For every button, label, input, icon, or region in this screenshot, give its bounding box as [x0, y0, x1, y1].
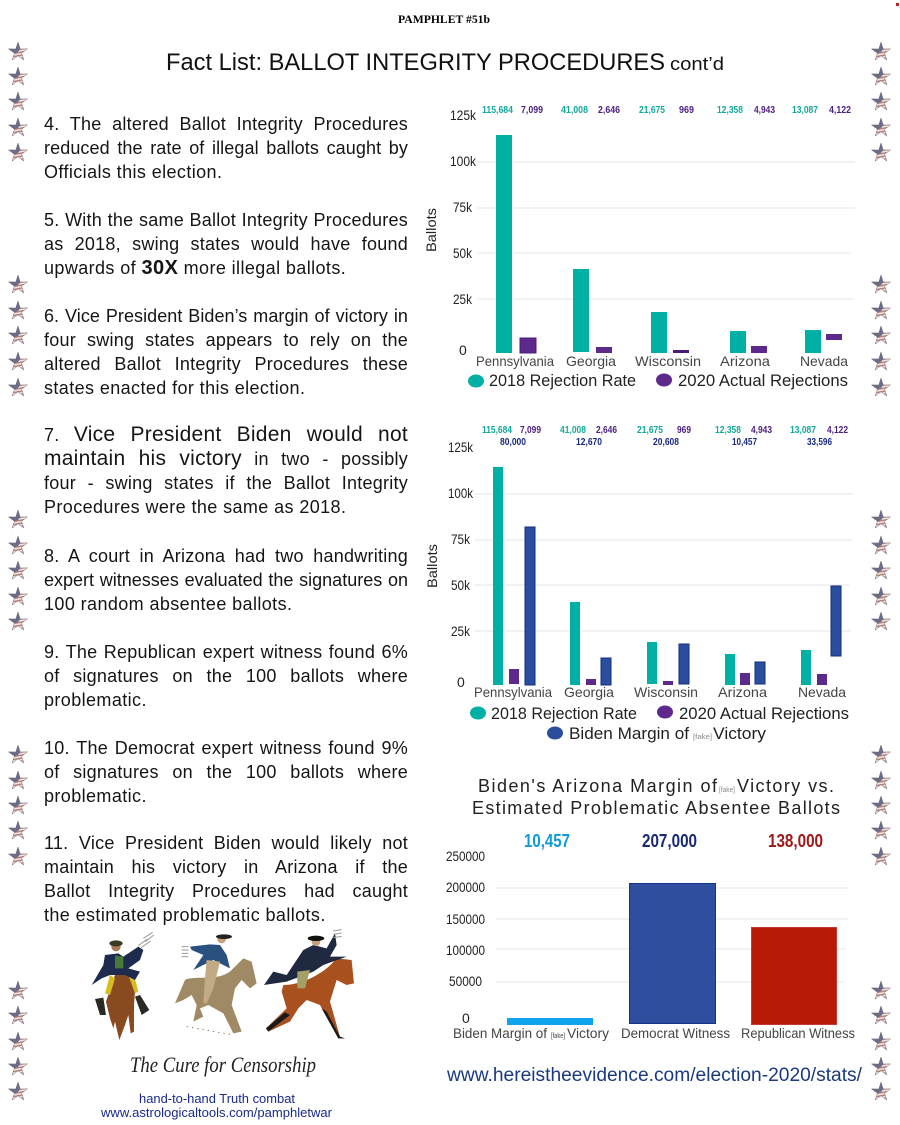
fact 7: Procedures were the same as 2018. [44, 497, 346, 517]
chart 2 y axis: 0 [457, 674, 465, 690]
chart 3 value labels: 138,000 [768, 831, 823, 851]
chart 2 legend: Biden Margin of [569, 724, 689, 743]
chart 1 bars [496, 135, 842, 353]
fact 6: altered Ballot Integrity Procedures these [44, 354, 408, 374]
chart 2 state labels: Georgia [564, 684, 614, 700]
chart 3 title [472, 776, 840, 818]
fact 8: 100 random absentee ballots. [44, 594, 292, 614]
chart 2 state labels [474, 684, 846, 700]
chart 2 value labels: 4,943 [751, 425, 772, 436]
chart 2 y axis: 75k [451, 531, 471, 547]
chart 2 y axis: 125k [448, 439, 474, 455]
chart 1 state labels: Nevada [800, 353, 848, 369]
chart 2 legend [470, 704, 849, 743]
chart 2 bars [493, 467, 841, 685]
chart 3 value labels: 207,000 [642, 831, 697, 851]
chart 2 legend: Victory [713, 724, 767, 743]
chart 1 state labels: Georgia [566, 353, 616, 369]
chart 2 y axis: Ballots [424, 544, 440, 588]
stars: left column [8, 42, 28, 1100]
chart 2 legend: 2020 Actual Rejections [679, 704, 849, 723]
chart 2 state labels: Arizona [718, 684, 767, 700]
chart 3 y axis: 100000 [446, 942, 485, 958]
pamphlet war url: www.astrologicaltools.com/pamphletwar [100, 1105, 333, 1120]
fact 4: Officials this election. [44, 162, 222, 182]
chart 2 value labels: 21,675 [637, 425, 663, 436]
fact 7: 7. Vice President Biden would not [44, 423, 408, 446]
fact 9: of signatures on the 100 ballots where [44, 666, 408, 686]
chart 3: Arizona margin vs problematic ballots [446, 776, 855, 1041]
chart 3 category labels: Biden Margin of [453, 1025, 547, 1041]
chart 1 state labels: Wisconsin [635, 353, 701, 369]
fact 11: maintain his victory in Arizona if the [44, 857, 408, 877]
fact 6: four swing states appears to rely on the [44, 330, 408, 350]
chart 3 y axis: 250000 [446, 848, 485, 864]
fact 11: 11. Vice President Biden would likely not [44, 833, 408, 853]
chart 2 value labels: 10,457 [732, 437, 757, 448]
source url: www.hereistheevidence.com/election-2020/stats/ [446, 1065, 863, 1086]
chart 1 y axis: 0 [459, 342, 467, 358]
chart 1 y axis: 25k [453, 291, 473, 307]
chart 3 title: Victory vs. [737, 776, 834, 796]
chart 3 title: Estimated Problematic Absentee Ballots [472, 798, 840, 818]
chart 2 legend: 2018 Rejection Rate [491, 704, 637, 723]
chart 3 value labels: 10,457 [524, 831, 570, 851]
fact 11 [44, 833, 408, 925]
chart 2 y axis: 50k [451, 577, 471, 593]
fact 8 [44, 546, 408, 614]
fact 8: 8. A court in Arizona had two handwriting [44, 546, 408, 566]
chart 2 y axis: 25k [451, 623, 471, 639]
chart 2 value labels: 115,684 [482, 425, 512, 436]
fact 7: maintain his victory in two - possibly [44, 447, 408, 470]
fact 11: Ballot Integrity Procedures had caught [44, 881, 408, 901]
chart 2 y axis: 100k [448, 485, 474, 501]
chart 2 value labels: 12,358 [715, 425, 741, 436]
chart 2 legend: [fake] [693, 734, 712, 741]
chart 2 value labels: 41,008 [560, 425, 586, 436]
chart 3 bars [507, 884, 836, 1025]
fact 11: the estimated problematic ballots. [44, 905, 326, 925]
chart 1 y axis: Ballots [423, 208, 439, 252]
fact 7 [44, 423, 408, 517]
fact 4: reduced the rate of illegal ballots caught by [44, 138, 408, 158]
tagline: hand-to-hand Truth combat [139, 1091, 295, 1106]
fact 9: 9. The Republican expert witness found 6% [44, 642, 408, 662]
chart 3 y axis: 50000 [449, 973, 482, 989]
chart 1 value labels: 969 [679, 105, 694, 116]
title: cont’d [670, 54, 724, 74]
fact 4 [44, 114, 408, 182]
chart 1 y axis: 125k [450, 107, 477, 123]
chart 1 legend: 2020 Actual Rejections [678, 371, 848, 390]
chart 2 y axis [424, 439, 474, 690]
chart 1 value labels: 7,099 [521, 105, 543, 116]
chart 2 state labels: Pennsylvania [474, 684, 552, 700]
illustration: three riders on horseback [92, 930, 354, 1040]
chart 1 value labels: 21,675 [639, 105, 665, 116]
fact 7: four - swing states if the Ballot Integrity [44, 473, 408, 493]
chart 2 value labels: 33,596 [807, 437, 832, 448]
illustration caption: the cure for censorship: The Cure for Censorship [130, 1052, 316, 1077]
chart 2 value labels: 7,099 [520, 425, 541, 436]
fact 9: problematic. [44, 690, 147, 710]
chart 1 value labels: 2,646 [598, 105, 620, 116]
fact 5: upwards of 30X more illegal ballots. [44, 257, 346, 279]
rider 2 [175, 934, 257, 1035]
chart 2 value labels: 20,608 [653, 437, 679, 448]
fact 5: as 2018, swing states would have found [44, 234, 408, 254]
fact 10: problematic. [44, 786, 147, 806]
chart 3 title: [fake] [719, 787, 735, 794]
chart 2 value labels: 4,122 [827, 425, 848, 436]
chart 1 y axis: 75k [453, 199, 473, 215]
chart 3 title: Biden's Arizona Margin of [478, 776, 718, 796]
chart 1: 2018 rejection rate vs 2020 rejections [423, 105, 855, 390]
fact 10: of signatures on the 100 ballots where [44, 762, 408, 782]
chart 1 y axis: 100k [450, 153, 477, 169]
fact 6: 6. Vice President Biden’s margin of victory in [44, 306, 408, 326]
chart 1 legend [468, 371, 848, 390]
chart 3 y axis [446, 848, 485, 1026]
fact 8: expert witnesses evaluated the signatures on [44, 570, 408, 590]
chart 2 value labels: 969 [677, 425, 691, 436]
fact 5 [44, 210, 408, 279]
chart 3 category labels: Democrat Witness [621, 1025, 730, 1041]
chart 3 category labels: Republican Witness [741, 1025, 855, 1041]
rider 3 [264, 930, 354, 1038]
chart 2 state labels: Nevada [798, 684, 846, 700]
fact 10: 10. The Democrat expert witness found 9% [44, 738, 408, 758]
chart 2 value labels: 2,646 [596, 425, 617, 436]
chart 1 y axis: 50k [453, 245, 473, 261]
fact 10 [44, 738, 408, 806]
fact 4: 4. The altered Ballot Integrity Procedures [44, 114, 408, 134]
chart 2 state labels: Wisconsin [634, 684, 698, 700]
chart 2 value labels: 80,000 [500, 437, 526, 448]
chart 1 y axis [423, 107, 477, 358]
chart 1 value labels: 41,008 [561, 105, 588, 116]
chart 3 category labels: [fake] [551, 1033, 565, 1040]
chart 1 legend: 2018 Rejection Rate [489, 371, 636, 390]
chart 2 value labels: 13,087 [790, 425, 816, 436]
stars: right column [872, 42, 890, 1100]
chart 1 value labels: 12,358 [717, 105, 743, 116]
chart 2 value labels [482, 425, 848, 448]
chart 1 value labels: 4,122 [829, 105, 851, 116]
chart 1 state labels [476, 353, 848, 369]
chart 3 y axis: 150000 [446, 911, 485, 927]
chart 1 value labels: 4,943 [754, 105, 775, 116]
chart 3 category labels: Victory [567, 1025, 609, 1041]
chart 3 y axis: 200000 [446, 879, 485, 895]
fact 5: 5. With the same Ballot Integrity Procedures [44, 210, 408, 230]
chart 1 state labels: Pennsylvania [476, 353, 554, 369]
chart 1 value labels: 115,684 [482, 105, 513, 116]
chart 1 value labels [482, 105, 851, 116]
fact 9 [44, 642, 408, 710]
title: Fact List: BALLOT INTEGRITY PROCEDURES [166, 49, 665, 76]
chart 3 y axis: 0 [462, 1010, 470, 1026]
chart 3 value labels [524, 831, 823, 851]
pamphlet number: PAMPHLET #51b [398, 12, 490, 26]
chart 2 value labels: 12,670 [576, 437, 602, 448]
chart 3 category labels [453, 1025, 855, 1041]
fact 6: states enacted for this election. [44, 378, 305, 398]
chart 2: rejections vs Biden margin [424, 425, 853, 743]
chart 1 state labels: Arizona [720, 353, 770, 369]
chart 1 value labels: 13,087 [792, 105, 818, 116]
fact 6 [44, 306, 408, 398]
rider 1 [92, 932, 154, 1040]
